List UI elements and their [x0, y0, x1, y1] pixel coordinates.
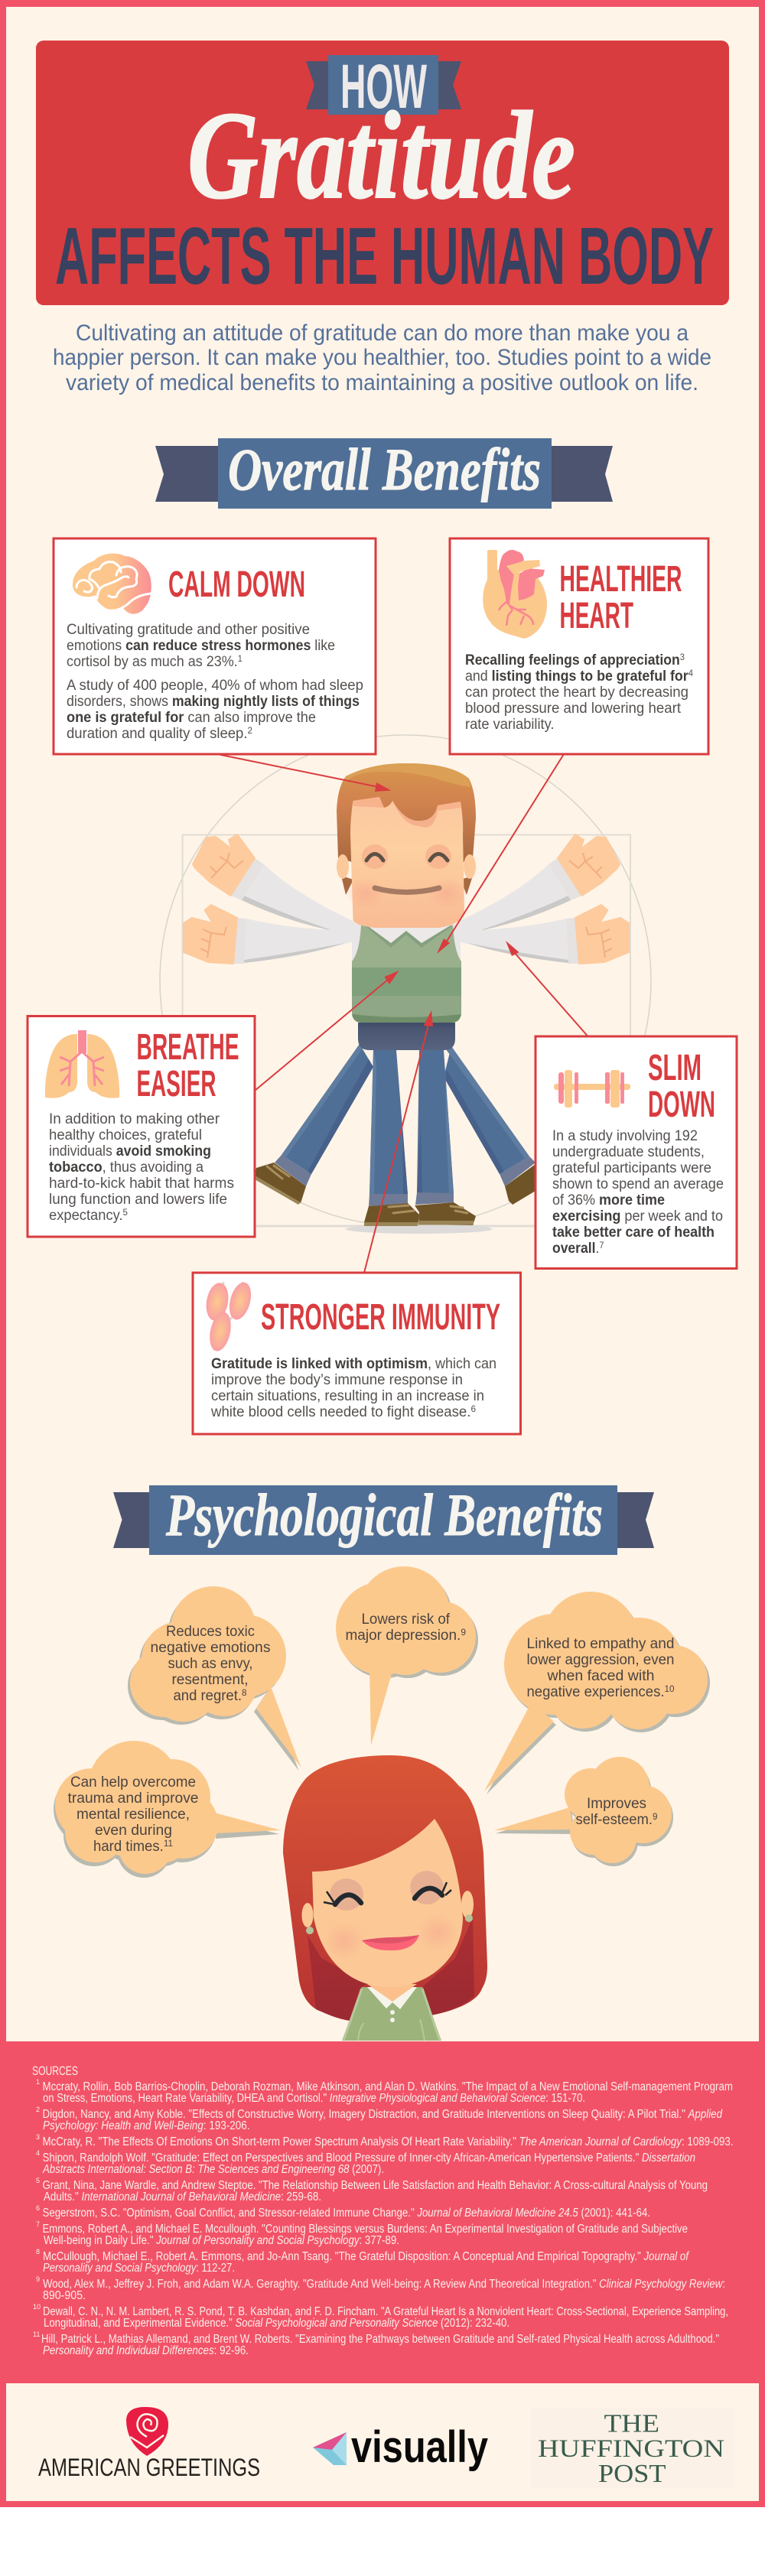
heading	[560, 559, 682, 636]
speech bubble: self-esteem: Improves	[587, 1796, 646, 1812]
heading: HEALTHIER	[560, 559, 682, 600]
source 2: 2	[36, 2106, 40, 2113]
speech bubble: resilience: Can help overcome	[70, 1774, 196, 1791]
body text	[49, 1111, 234, 1224]
title panel	[36, 41, 729, 305]
body text: of 36% more time	[552, 1192, 665, 1208]
mouth	[362, 1935, 419, 1950]
source 9: 890-905.	[43, 2289, 86, 2302]
body text: In addition to making other	[49, 1111, 220, 1127]
vitruvian circle and square	[160, 735, 651, 1226]
body text: In a study involving 192	[552, 1128, 698, 1144]
body text: 7	[599, 1240, 604, 1251]
body text	[67, 622, 363, 742]
sweater vest	[352, 924, 461, 1023]
intro paragraph: variety of medical benefits to maintaining a positive outlook on life.	[66, 370, 698, 395]
body text: can protect the heart by decreasing	[465, 685, 688, 701]
source 4: Abstracts International: Section B: The Sciences and Engineering 68 (2007).	[42, 2163, 384, 2176]
speech bubble: resilience: trauma and improve	[67, 1791, 199, 1807]
arrow: heart to chest	[437, 754, 564, 954]
body text: A study of 400 people, 40% of whom had sleep	[67, 678, 363, 694]
panel: slim down	[536, 1036, 737, 1268]
body text: exercising per week and to	[552, 1208, 723, 1225]
speech bubble: empathy: lower aggression, even	[526, 1652, 675, 1668]
heading	[136, 1027, 239, 1104]
hips	[358, 1023, 455, 1050]
speech bubble: toxic emotions: such as envy,	[168, 1656, 252, 1672]
panel: stronger immunity	[193, 1273, 520, 1434]
logo: American Greetings: AMERICAN GREETINGS	[38, 2454, 260, 2481]
source 9: Wood, Alex M., Jeffrey J. Froh, and Adam W.A. Geraghty. "Gratitude And Well-being: A Review And Theoretical Integration." Clinical Psychology Review:	[43, 2278, 725, 2291]
sources section: SOURCES	[32, 2064, 78, 2078]
logo: Visually: visually	[351, 2422, 488, 2472]
icon: heart	[483, 550, 547, 639]
body text: disorders, shows making nightly lists of things	[67, 694, 360, 710]
source 8: Personality and Social Psychology: 112-27.	[43, 2262, 235, 2275]
sweater	[342, 1984, 441, 2041]
source 7: Well-being in Daily Life." Journal of Personality and Social Psychology: 377-89.	[44, 2234, 399, 2247]
body text: 3	[680, 652, 685, 662]
speech bubble: empathy: 10	[664, 1683, 675, 1694]
speech bubble: resilience: even during	[95, 1823, 172, 1839]
body text: expectancy.	[49, 1208, 125, 1224]
speech bubble: depression: 9	[461, 1627, 466, 1638]
body text: 5	[123, 1207, 128, 1218]
body text: improve the body’s immune response in	[211, 1372, 463, 1388]
body text: and listing things to be grateful for	[465, 668, 702, 685]
source 3: McCraty, R. "The Effects Of Emotions On Short-term Power Spectrum Analysis Of Heart Rate Variability." The American Journal of Cardiology: 1089-093.	[43, 2135, 733, 2148]
source 4	[36, 2149, 695, 2176]
speech bubble: self-esteem	[494, 1757, 673, 1866]
source 4: 4	[36, 2149, 40, 2157]
body text: lung function and lowers life	[49, 1192, 227, 1208]
source 6: Segerstrom, S.C. "Optimism, Goal Conflict, and Stressor-related Immune Change." Journal of Behavioral Medicine 24.5 (2001): 441-64.	[43, 2207, 650, 2220]
eyes	[324, 1871, 451, 1911]
logo: American Greetings	[38, 2407, 260, 2481]
body text: white blood cells needed to fight disease.	[211, 1404, 476, 1420]
source 3: 3	[36, 2133, 40, 2141]
panel: breathe easier	[28, 1016, 255, 1237]
body text: 6	[470, 1403, 476, 1414]
man figure	[184, 763, 629, 1234]
source 10	[33, 2303, 728, 2330]
HOW ribbon	[306, 52, 461, 122]
body text: cortisol by as much as 23%.	[67, 654, 248, 670]
section banner: psychological benefits: Psychological Benefits	[165, 1482, 603, 1548]
body text: shown to spend an average	[552, 1176, 724, 1192]
legs	[275, 1044, 536, 1206]
heading: EASIER	[136, 1064, 216, 1104]
speech bubble: toxic emotions: 8	[242, 1687, 247, 1698]
arrow: lungs to chest	[255, 971, 399, 1091]
speech bubble: resilience: 11	[164, 1838, 173, 1849]
icon: lymph nodes	[203, 1280, 255, 1353]
speech bubble: depression	[336, 1566, 478, 1745]
source 2: Psychology: Health and Well-Being: 193-206.	[43, 2119, 249, 2132]
HOW ribbon: HOW	[340, 52, 427, 122]
arrow: calm down to head	[217, 754, 392, 792]
speech bubble: toxic emotions: negative emotions	[150, 1640, 271, 1656]
source 5	[36, 2177, 708, 2204]
source 10: 10	[33, 2303, 41, 2311]
body text: overall.	[552, 1241, 600, 1257]
panel: calm down	[54, 538, 376, 754]
intro paragraph	[53, 320, 711, 395]
body text: duration and quality of sleep.	[67, 726, 252, 742]
heading: STRONGER IMMUNITY	[261, 1297, 500, 1338]
source 1: on Stress, Emotions, Heart Rate Variability, DHEA and Cortisol." Integrative Physiological and Behavioral Science: 151-70.	[43, 2092, 585, 2105]
connector arrows	[217, 754, 588, 1273]
body text	[210, 1356, 496, 1420]
speech bubble: empathy	[484, 1592, 710, 1794]
body text: Cultivating gratitude and other positive	[67, 622, 310, 638]
heading: BREATHE	[136, 1027, 239, 1068]
speech bubble: empathy: Linked to empathy and	[526, 1636, 675, 1652]
source 11: Personality and Individual Differences: 92-96.	[43, 2344, 249, 2357]
hair shadow	[308, 1917, 474, 2021]
speech bubble: toxic emotions	[128, 1586, 301, 1771]
body text: Gratitude is linked with optimism, which can	[211, 1356, 496, 1372]
source 4: Shipon, Randolph Wolf. "Gratitude: Effect on Perspectives and Blood Pressure of Inner-city African-American Hypertensive Patients." Dissertation	[43, 2152, 695, 2165]
body text: tobacco, thus avoiding a	[49, 1160, 203, 1176]
heading	[648, 1048, 715, 1125]
source 8: McCullough, Michael E., Robert A. Emmons, and Jo-Ann Tsang. "The Grateful Disposition: A Conceptual And Empirical Topography." Journal of	[43, 2250, 689, 2263]
body text: 4	[688, 668, 693, 678]
body text: one is grateful for can also improve the	[67, 710, 316, 726]
speech bubble: self-esteem: 9	[653, 1811, 658, 1822]
logo: The Huffington Post	[531, 2408, 734, 2489]
source 11	[33, 2330, 719, 2357]
logo: The Huffington Post: HUFFINGTON	[538, 2435, 724, 2463]
speech bubble: toxic emotions: resentment,	[171, 1672, 248, 1688]
intro paragraph: Cultivating an attitude of gratitude can do more than make you a	[76, 320, 688, 346]
hair	[283, 1755, 487, 2021]
heading: HEART	[560, 596, 633, 636]
ears and earrings	[301, 1891, 474, 1934]
speech bubble: resilience: hard times.	[93, 1839, 165, 1855]
speech bubble: self-esteem: self-esteem.	[575, 1812, 655, 1828]
arrow: immunity to torso	[364, 1010, 433, 1273]
heading: DOWN	[648, 1085, 715, 1125]
body text: Recalling feelings of appreciation	[465, 652, 680, 668]
source 11: 11	[33, 2330, 40, 2338]
head	[337, 763, 476, 928]
section banner: overall benefits: Overall Benefits	[228, 436, 541, 503]
body text: rate variability.	[465, 717, 554, 733]
source 2	[36, 2106, 723, 2132]
body text: blood pressure and lowering heart	[465, 701, 682, 717]
speech bubble: resilience	[54, 1741, 281, 1878]
woman figure	[283, 1755, 487, 2041]
body text	[552, 1128, 724, 1257]
body text: certain situations, resulting in an increase in	[211, 1388, 484, 1404]
body text: hard-to-kick habit that harms	[49, 1176, 234, 1192]
heading: CALM DOWN	[168, 564, 305, 605]
face	[312, 1819, 463, 1987]
body text: 1	[238, 653, 243, 664]
source 5: Adults." International Journal of Behavioral Medicine: 259-68.	[44, 2191, 321, 2204]
icon: brain	[73, 554, 151, 614]
body text: undergraduate students,	[552, 1144, 705, 1160]
body text: individuals avoid smoking	[49, 1143, 211, 1160]
source 8: 8	[36, 2248, 40, 2256]
panel: healthier heart	[450, 538, 708, 754]
body text: take better care of health	[552, 1225, 715, 1241]
body text: 2	[247, 725, 252, 736]
ground shadow	[346, 1225, 493, 1234]
body text: healthy choices, grateful	[49, 1127, 202, 1143]
intro paragraph: happier person. It can make you healthier, too. Studies point to a wide	[53, 345, 711, 370]
shoes	[255, 1163, 536, 1226]
arms and hands	[184, 834, 629, 964]
source 7: 7	[36, 2220, 40, 2228]
sources section	[32, 2064, 733, 2357]
cheeks	[323, 1913, 459, 1961]
logo: The Huffington Post: THE	[604, 2409, 659, 2438]
speech bubble: toxic emotions: Reduces toxic	[166, 1624, 255, 1640]
arrow: slim down to arm	[506, 941, 588, 1036]
speech bubble: empathy: negative experiences.	[526, 1684, 668, 1700]
heading: SLIM	[648, 1048, 702, 1088]
speech bubble: empathy: when faced with	[546, 1668, 655, 1684]
logo: Visually	[313, 2422, 488, 2472]
source 6: 6	[36, 2204, 40, 2212]
source 10: Longitudinal, and Experimental Evidence." Social Psychological and Personality Science (2012): 232-40.	[44, 2317, 509, 2330]
body text: grateful participants were	[552, 1160, 711, 1176]
logo: The Huffington Post: POST	[598, 2460, 666, 2488]
icon: lungs	[45, 1030, 119, 1098]
body text: emotions can reduce stress hormones like	[67, 638, 335, 654]
speech bubble: toxic emotions: and regret.	[173, 1688, 243, 1704]
source 1	[36, 2078, 733, 2105]
source 8	[36, 2248, 689, 2275]
body text	[465, 652, 693, 733]
source 5: 5	[36, 2177, 40, 2184]
speech bubble: depression: Lowers risk of	[361, 1612, 451, 1628]
speech bubble: depression: major depression.	[346, 1628, 461, 1644]
speech bubble: resilience: mental resilience,	[76, 1807, 190, 1823]
icon: dumbbell	[554, 1070, 630, 1107]
source 9: 9	[36, 2275, 40, 2283]
source 9	[36, 2275, 725, 2302]
source 7	[36, 2220, 688, 2247]
source 1: 1	[36, 2078, 40, 2086]
title script word: Gratitude	[187, 86, 575, 225]
